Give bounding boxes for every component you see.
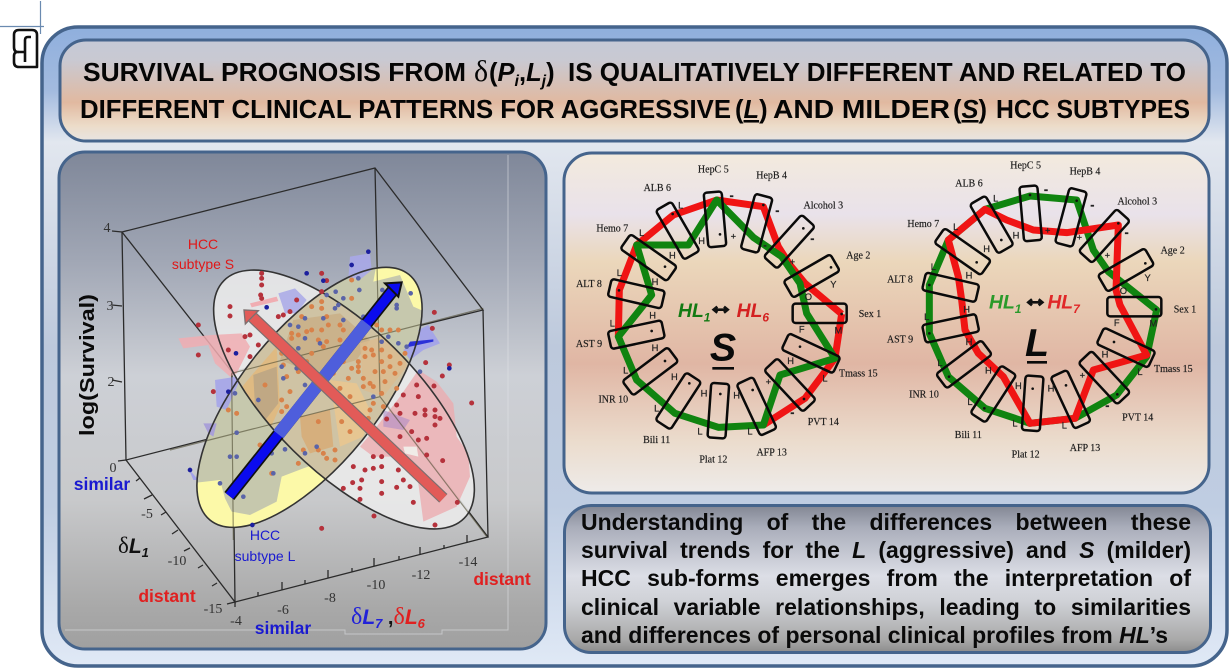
centre legend S: S [710,326,736,370]
icon: logo mark [14,30,37,67]
level letters L: - [1125,226,1129,240]
centre legend L: L [1025,321,1049,365]
axis annotations: distant [473,569,531,589]
variable boxes S [608,191,847,439]
axis tick numbers: -14 [459,555,477,570]
centre legend L: HL [1047,292,1073,313]
level letters S: L [623,365,628,375]
centre legend S [678,301,769,370]
level letters L: L [1062,420,1067,430]
registration lines [0,1,44,34]
level letters S: L [822,374,828,384]
variable labels S: AFP 13 [756,448,787,459]
axis label: delta L7, delta L6: δL [351,604,375,630]
level letters L: H [983,244,990,254]
level letters S: + [766,377,771,387]
centre legend S: HL [678,301,704,322]
variable labels L: INR 10 [909,390,939,401]
level letters S: O [805,292,812,302]
title line 1: DIFFERENT CLINICAL PATTERNS FOR AGGRESSIVE [80,96,731,124]
variable labels L: Alcohol 3 [1118,196,1157,207]
centre legend S: HL [737,301,762,322]
level letters S: L [617,268,622,278]
level letters S: L [697,426,703,436]
variable labels L: AST 9 [887,335,913,346]
axis tick numbers: -15 [204,602,222,617]
variable labels S: ALB 6 [644,183,671,194]
label: HCC subtype L: subtype L [235,548,296,564]
label: HCC subtype L: HCC [250,527,280,543]
variable labels L: Hemo 7 [907,219,939,230]
level letters L: - [1044,182,1048,196]
variable labels L: AFP 13 [1070,443,1100,454]
axis annotations: similar [74,474,130,494]
variable labels L [887,160,1196,460]
title line 1: ) [546,59,555,87]
level letters L: H [966,337,972,347]
panel: explanatory text: HCC sub-forms emerges from the interpretation of [581,565,1191,591]
variable labels S: Plat 12 [699,454,727,465]
variable labels S: Sex 1 [859,309,881,320]
axis tick numbers: -12 [412,568,430,583]
level letters S: H [649,310,656,320]
level letters S: H [652,277,658,287]
level letters S: M [834,325,842,335]
label: HCC subtype S: HCC [188,236,218,252]
axis label: delta L7, delta L6: 6 [418,616,426,631]
scatter points: blue muted [220,278,420,497]
level letters L: H [1048,384,1054,394]
panel: 3D survival scatter plot [59,152,546,649]
level letters S: L [747,426,753,436]
axis tick numbers: 4 [104,221,110,236]
level letters L: L [1137,367,1143,377]
ellipse fill: subtype L [157,232,462,563]
level letters L: L [953,222,958,232]
title line 1: j [540,73,547,90]
radar lines S [618,200,842,427]
variable boxes L [922,185,1161,431]
axis tick numbers: -5 [141,507,153,522]
centre legend S: 1 [704,311,711,325]
axis label: delta L1: 1 [142,545,149,560]
scatter points: orange [228,280,405,473]
axis tick numbers: -6 [277,603,289,618]
level letters S: F [799,325,805,335]
scatter points: blue outer [190,252,449,525]
panel: radar profiles [564,153,1209,493]
level letters L: L [924,312,929,322]
axis tick numbers: -8 [324,591,336,606]
title line 1 [80,55,1190,124]
variable labels L: Age 2 [1161,246,1185,257]
scatter cloud with ellipses and arrows [170,249,487,540]
level letters S: L [654,404,659,414]
variable labels S: Bili 11 [643,435,670,446]
panel: explanatory text [563,504,1212,654]
level letters L: L [937,358,943,368]
level letters L: H [963,305,970,315]
level letters S [610,188,842,436]
level letters L: H [1102,349,1108,359]
level letters S: Y [830,279,837,289]
radar lines L [929,196,1157,423]
centre legend L: HL [989,292,1015,313]
level letters S: H [671,372,678,382]
level letters L: H [1015,381,1022,391]
level letters S: H [787,356,794,366]
panel: explanatory text: and differences of personal clinical profiles from HL’s [581,622,1168,648]
panel: explanatory text: survival trends for the L (aggressive) and S (milder) [581,537,1191,563]
level letters S: - [775,203,779,217]
level letters S: + [731,231,736,241]
variable labels L: Plat 12 [1012,449,1040,460]
radar chart: L subtype HL1 vs HL7 [887,160,1196,460]
title line 1: δ [474,55,488,88]
level letters S: H [733,390,740,400]
level letters L: M [1149,319,1157,329]
level letters L: + [1045,225,1050,235]
variable labels S: ALT 8 [576,279,602,290]
label: HCC subtype S: subtype S [172,256,234,272]
axis label: log(Survival): log(Survival) [76,294,99,436]
level letters L: L [967,397,973,407]
level letters L: + [1080,370,1085,380]
centre legend S: 6 [762,311,769,325]
variable labels L: HepB 4 [1070,167,1100,178]
level letters S: L [678,200,683,210]
level letters L: L [1012,419,1018,429]
level letters S: L [639,228,644,238]
axis tick numbers [104,221,477,629]
level letters S: H [701,389,707,399]
panel: title banner [60,40,1209,141]
axis tick numbers: 2 [108,375,114,390]
variable labels S: AST 9 [576,339,602,350]
level letters S: H [669,250,676,260]
axis label: delta L7, delta L6: δL [394,604,418,630]
title line 1: L [526,59,542,87]
axis label: delta L7, delta L6: , [382,607,394,629]
title line 1: , [519,59,526,87]
variable labels L: ALT 8 [887,274,913,285]
centre legend L: 1 [1015,302,1022,316]
axis tick numbers: 0 [110,461,116,476]
level letters L: H [1013,230,1019,240]
level letters S: - [763,240,767,251]
variable labels S: PVT 14 [808,417,839,428]
variable labels L: PVT 14 [1122,412,1153,423]
level letters L: H [966,271,972,281]
panel: explanatory text: Understanding of the differences between these [581,509,1191,535]
axis annotations: similar [255,618,311,638]
level letters S: - [790,406,794,420]
variable labels S: Age 2 [846,250,870,261]
variable labels L: Tmass 15 [1154,364,1193,375]
level letters L: - [1105,398,1109,412]
title line 1: HCC SUBTYPES [996,96,1190,124]
level letters L: Y [1145,273,1152,283]
level letters L: + [1077,233,1082,243]
variable labels S: Alcohol 3 [804,201,843,212]
axis tick numbers: 3 [106,299,114,314]
ellipse fill: subtype S [173,229,515,570]
level letters S: - [730,188,734,202]
level letters L: + [1105,251,1110,261]
title line 1: SURVIVAL PROGNOSIS FROM [83,59,466,87]
level letters L: H [985,365,992,375]
overlap surface [239,294,408,478]
variable labels S: HepB 4 [756,171,787,182]
radar chart: S subtype HL1 vs HL6 [576,165,881,465]
axis tick numbers: -4 [230,614,242,629]
centre legend L [989,292,1081,365]
variable labels L: HepC 5 [1010,160,1041,171]
title line 1: i [515,73,520,90]
level letters L: - [1090,198,1094,212]
variable labels S: HepC 5 [698,165,729,176]
variable labels L: Bili 11 [955,430,982,441]
box lines seen through ellipses [170,250,487,540]
title line 1: IS QUALITATIVELY DIFFERENT AND RELATED TO [568,59,1186,87]
level letters S: + [790,257,795,267]
panel: explanatory text: clinical variable relationships, leading to similarities [581,594,1191,620]
level letters L: L [931,262,936,272]
title line 1: (P [489,59,515,87]
arrow: red subtype S [244,310,443,498]
axis annotations [74,474,531,638]
level letters S: L [610,319,615,329]
level letters L: O [1120,286,1127,296]
level letters S: H [698,236,705,246]
variable labels L: Sex 1 [1174,305,1196,316]
level letters S: - [810,231,814,245]
axis label: delta L7, delta L6: 7 [375,616,383,631]
box centre dots L [929,195,1156,408]
grey surface on subtype L [198,269,422,515]
variable labels S: INR 10 [598,394,628,405]
variable labels L: ALB 6 [955,179,983,190]
title line 1: (S) [953,96,987,124]
pink and blue data surfaces [178,253,470,522]
axis label: delta L1: δL [118,533,142,558]
3D box axes [112,168,488,607]
scatter points: red [198,273,472,528]
title line 1: AND MILDER [773,96,950,124]
axis annotations: distant [138,586,196,606]
arrow: blue subtype L [229,282,402,496]
box centre dots S [619,205,842,399]
centre legend L: 7 [1073,302,1081,316]
variable labels S [576,165,881,465]
variable labels S: Tmass 15 [839,369,878,380]
level letters S: H [652,343,658,353]
title line 1: (L) [735,96,768,124]
axis tick numbers: -10 [168,554,186,569]
variable labels S: Hemo 7 [596,223,628,234]
level letters L [924,182,1157,430]
axis tick numbers: -10 [367,578,385,593]
ellipse outlines [157,229,515,570]
level letters L: L [993,194,998,204]
level letters L: F [1114,318,1120,328]
